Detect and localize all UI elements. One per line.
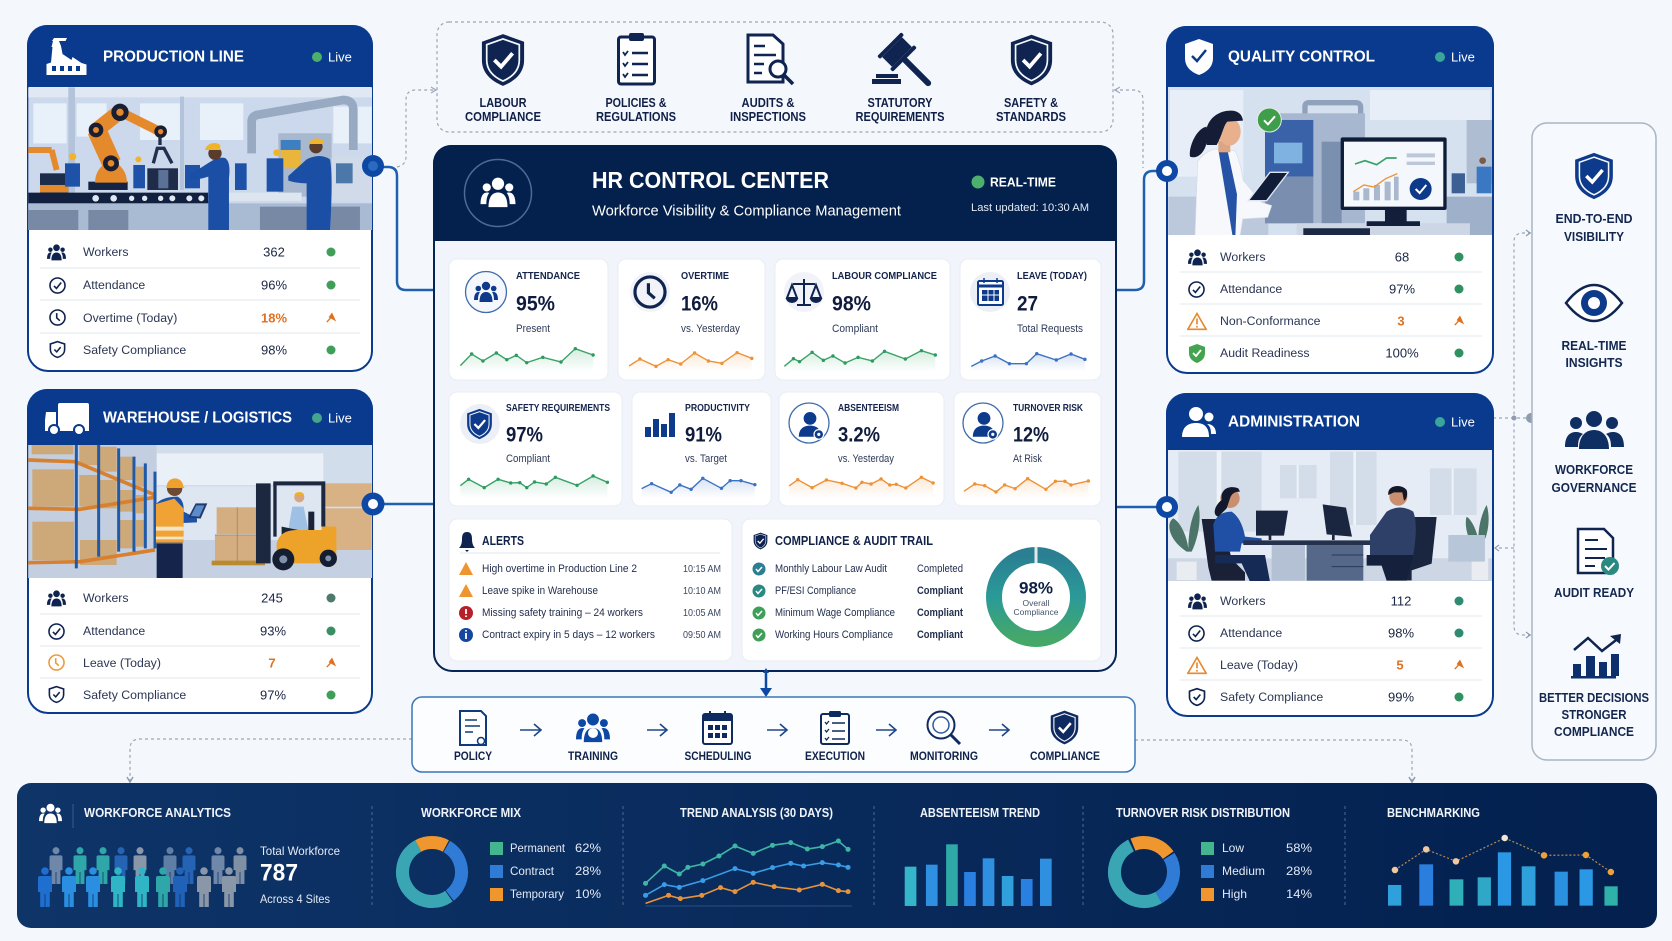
icon: labour compliance shield [482, 34, 524, 86]
label: workforce governance: WORKFORCE [1555, 463, 1633, 477]
step: compliance: COMPLIANCE [1030, 751, 1100, 763]
icon: workforce governance [1565, 411, 1624, 449]
row: leave 5: Leave (Today) [1220, 658, 1298, 672]
row: PF/ESI compliance: PF/ESI Compliance [775, 585, 856, 597]
arrow [767, 724, 787, 736]
step: scheduling [684, 711, 752, 763]
label: better decisions stronger compliance: BETTER DECISIONS [1539, 691, 1649, 705]
alert: missing safety training: Missing safety training – 24 workers [482, 607, 643, 619]
bar chart: absenteeism [905, 844, 1052, 906]
row: safety compliance 97%: Safety Compliance [83, 688, 186, 702]
panel: workflow [412, 697, 1135, 772]
section: absenteeism trend [905, 806, 1052, 906]
status: live: Live [328, 50, 352, 64]
label: statutory requirements: REQUIREMENTS [856, 110, 944, 124]
row: audit readiness 100% [1189, 344, 1464, 363]
legend: workforce mix: 62% [575, 841, 601, 855]
legend: workforce mix: 28% [575, 864, 601, 878]
KPI card: productivity: PRODUCTIVITY [685, 402, 750, 414]
panel: quality control [1166, 26, 1495, 373]
donut chart: 98% overall compliance: Overall [1023, 598, 1050, 608]
KPI card: safety requirements [449, 392, 622, 506]
status: live: Live [1451, 50, 1475, 64]
KPI card: labour compliance: 98% [832, 292, 871, 316]
row: PF/ESI compliance [752, 584, 963, 598]
row: non-conformance 3 [1188, 314, 1463, 329]
arrow [876, 724, 896, 736]
row: attendance 93%: Attendance [83, 624, 145, 638]
row: workers 362 [47, 244, 336, 260]
section: absenteeism trend: ABSENTEEISM TREND [920, 806, 1040, 820]
panel: alerts [449, 519, 732, 661]
scene: warehouse shelves and forklift [28, 445, 375, 579]
row: workers 362: Workers [83, 245, 129, 259]
icon: bell [459, 532, 475, 552]
KPI card: productivity [632, 392, 771, 506]
connector node: quality control [1156, 160, 1178, 182]
legend: workforce mix: Contract [510, 864, 555, 878]
KPI card: attendance: ATTENDANCE [516, 270, 580, 282]
connector node: production [362, 155, 384, 177]
label: statutory requirements [856, 96, 944, 124]
status: live: Live [328, 410, 352, 426]
heading: compliance and audit trail: COMPLIANCE & AUDIT TRAIL [775, 534, 933, 548]
status: live [312, 410, 352, 426]
heading: administration: ADMINISTRATION [1228, 414, 1360, 430]
label: end-to-end visibility: END-TO-END [1556, 212, 1632, 226]
step: training [568, 714, 618, 763]
section: workforce analytics: WORKFORCE ANALYTICS [84, 806, 231, 820]
legend: turnover risk: Medium [1222, 864, 1265, 878]
row: safety compliance 97%: 97% [260, 688, 286, 702]
panel: outcomes [1532, 123, 1656, 760]
alert: contract expiry: 09:50 AM [683, 629, 721, 641]
row: monthly labour law audit [752, 562, 963, 576]
row: attendance 96%: 96% [261, 278, 287, 292]
panel: production line [27, 25, 375, 371]
row: minimum wage compliance: Compliant [917, 607, 963, 619]
row: overtime 18%: 18% [261, 310, 287, 326]
row: working hours compliance: Compliant [917, 629, 963, 641]
KPI card: absenteeism: 3.2% [838, 424, 880, 446]
label: audits and inspections: AUDITS & [742, 96, 794, 110]
label: real-time insights: INSIGHTS [1566, 356, 1622, 370]
section: workforce mix [391, 806, 601, 913]
label: audits and inspections [730, 96, 806, 124]
KPI card: attendance: 95% [516, 292, 555, 316]
KPI card: labour compliance: Compliant [832, 323, 878, 335]
section: benchmarking: BENCHMARKING [1387, 806, 1480, 820]
icon: administrators [1182, 407, 1216, 437]
label: better decisions stronger compliance: COMPLIANCE [1554, 725, 1634, 739]
sparklines for KPI cards [460, 349, 1088, 498]
legend: turnover risk: 14% [1286, 887, 1312, 901]
KPI card: attendance: Present [516, 323, 550, 335]
row: attendance 97%: 97% [1389, 282, 1415, 296]
donut chart: 98% overall compliance: 98% [1019, 578, 1053, 598]
icon: truck [45, 403, 89, 435]
legend: turnover risk: 58% [1286, 841, 1312, 855]
row: safety compliance 99%: 99% [1388, 690, 1414, 704]
KPI card: safety requirements: Compliant [506, 453, 550, 465]
icon: better decisions chart [1571, 634, 1621, 678]
row: working hours compliance: Working Hours Compliance [775, 629, 893, 641]
step: training: TRAINING [568, 751, 618, 763]
step: compliance [1030, 711, 1100, 763]
status: live: Live [1451, 414, 1475, 430]
stat rows: warehouse [40, 590, 360, 702]
row: attendance 98% [1189, 626, 1464, 641]
alert: high overtime: High overtime in Production Line 2 [482, 563, 637, 575]
heading: quality control: QUALITY CONTROL [1228, 48, 1375, 66]
section: turnover risk distribution: TURNOVER RISK DISTRIBUTION [1116, 806, 1290, 820]
legend: turnover risk: Low [1222, 841, 1244, 855]
row: workers 245: 245 [261, 590, 283, 606]
icon: audit shield [754, 533, 767, 549]
stat: total workforce 787 [260, 844, 340, 906]
icon: end-to-end shield [1575, 153, 1613, 199]
donut chart: 98% overall compliance: Compliance [1014, 607, 1059, 617]
label: labour compliance [465, 96, 541, 124]
panel: regulatory requirements [431, 22, 1120, 132]
KPI card: labour compliance: LABOUR COMPLIANCE [832, 270, 937, 282]
label: end-to-end visibility [1556, 212, 1632, 244]
row: attendance 98%: Attendance [1220, 626, 1282, 640]
icon: people in circle [464, 160, 532, 226]
panel: compliance and audit trail [742, 519, 1101, 661]
step: policy [454, 711, 492, 763]
label: labour compliance: LABOUR [480, 96, 526, 110]
legend: workforce mix: 10% [575, 887, 601, 901]
row: non-conformance 3: 3 [1397, 314, 1405, 328]
line chart: 30 day trends [646, 841, 852, 906]
stat rows: administration [1180, 593, 1482, 705]
arrow [989, 724, 1009, 736]
status: live [1435, 50, 1475, 64]
section: trend analysis: TREND ANALYSIS (30 DAYS) [680, 806, 833, 820]
label: safety and standards [996, 96, 1066, 124]
donut chart: turnover risk [1103, 831, 1185, 913]
row: leave 5: 5 [1396, 658, 1404, 672]
row: leave 5 [1188, 658, 1463, 673]
heading: warehouse: WAREHOUSE / LOGISTICS [103, 410, 292, 426]
row: audit readiness 100%: Audit Readiness [1220, 346, 1310, 360]
row: workers 68: 68 [1395, 250, 1409, 264]
row: safety compliance 98% [50, 342, 336, 358]
row: workers 112 [1188, 593, 1464, 609]
panel: warehouse and logistics [27, 389, 375, 713]
row: workers 68: Workers [1220, 250, 1266, 264]
row: safety compliance 98%: 98% [261, 342, 287, 358]
label: audit ready: AUDIT READY [1554, 586, 1635, 600]
label: policies and regulations: POLICIES & [606, 96, 666, 110]
row: attendance 98%: 98% [1388, 626, 1414, 640]
alert: missing safety training [459, 606, 721, 620]
connector: production to top requirements box [397, 90, 436, 167]
legend: turnover risk: 28% [1286, 864, 1312, 878]
section: benchmarking [1387, 806, 1618, 906]
stat rows: quality control [1180, 249, 1482, 363]
stat rows: production line [40, 244, 360, 358]
alert: contract expiry: Contract expiry in 5 days – 12 workers [482, 629, 655, 641]
KPI card: safety requirements: 97% [506, 424, 543, 446]
KPI card: absenteeism: vs. Yesterday [838, 453, 894, 465]
panel: administration [1166, 393, 1495, 716]
section: workforce mix: WORKFORCE MIX [421, 806, 522, 820]
connector: administration to outcomes panel [1493, 230, 1536, 638]
row: attendance 96% [50, 278, 336, 293]
connector: requirements box to quality [1114, 90, 1143, 168]
row: workers 362: 362 [263, 244, 285, 260]
donut chart: workforce mix [391, 831, 473, 913]
label: real-time insights [1562, 339, 1626, 370]
KPI card: productivity: 91% [685, 424, 722, 446]
KPI card: leave today: 27 [1017, 292, 1038, 316]
alert: missing safety training: 10:05 AM [683, 607, 721, 619]
scene: quality inspector with monitor [1167, 87, 1495, 237]
KPI card: attendance [449, 259, 608, 380]
connector: production line to HR center [380, 167, 433, 290]
alert: leave spike [459, 584, 721, 597]
row: workers 245 [47, 590, 336, 606]
pictogram: workforce people [38, 847, 246, 907]
step: execution: EXECUTION [805, 751, 865, 763]
label: workforce governance [1552, 463, 1636, 495]
title: HR CONTROL CENTER [592, 167, 829, 193]
donut chart: 98% overall compliance [994, 547, 1078, 639]
stat: total workforce 787: Total Workforce [260, 844, 340, 858]
KPI card: overtime: vs. Yesterday [681, 323, 740, 335]
connector: administration to HR center [1117, 506, 1160, 508]
label: policies and regulations: REGULATIONS [596, 110, 676, 124]
row: overtime 18%: Overtime (Today) [83, 311, 177, 325]
status: live [312, 50, 352, 64]
row: attendance 93%: 93% [260, 624, 286, 638]
KPI card: turnover risk [954, 392, 1101, 506]
row: workers 245: Workers [83, 591, 129, 605]
arrow [520, 724, 541, 736]
KPI card: leave today: Total Requests [1017, 323, 1083, 335]
combo chart: benchmarking [1388, 838, 1618, 906]
step: scheduling: SCHEDULING [684, 751, 752, 763]
KPI card: overtime [618, 259, 765, 380]
legend: turnover risk [1201, 841, 1312, 901]
heading: alerts: ALERTS [482, 534, 524, 548]
row: attendance 97% [1189, 282, 1464, 297]
row: leave 7: 7 [268, 656, 276, 670]
row: audit readiness 100%: 100% [1385, 346, 1419, 360]
KPI card: leave today: LEAVE (TODAY) [1017, 270, 1087, 282]
last updated: Last updated: 10:30 AM [971, 202, 1089, 214]
row: non-conformance 3: Non-Conformance [1220, 314, 1321, 328]
alert: contract expiry [459, 628, 721, 642]
label: real-time insights: REAL-TIME [1562, 339, 1626, 353]
row: workers 112: Workers [1220, 594, 1266, 608]
KPI card: absenteeism [779, 392, 944, 506]
KPI card: overtime: OVERTIME [681, 270, 729, 282]
icon: policies clipboard [618, 33, 654, 84]
connector node: warehouse [362, 492, 384, 516]
row: safety compliance 97% [49, 687, 336, 702]
legend: workforce mix: Permanent [510, 841, 566, 855]
section: trend analysis [646, 806, 852, 906]
stat: total workforce 787: 787 [260, 860, 298, 886]
KPI card: turnover risk: At Risk [1013, 453, 1042, 465]
connector node: administration [1156, 496, 1178, 518]
step: monitoring: MONITORING [910, 751, 978, 763]
icon: shield [1185, 39, 1213, 75]
row: minimum wage compliance [752, 606, 963, 620]
step: execution [805, 711, 865, 763]
panel: HR control center [433, 145, 1117, 671]
status: live [1435, 414, 1475, 430]
row: attendance 97%: Attendance [1220, 282, 1282, 296]
legend: workforce mix [490, 841, 601, 901]
row: safety compliance 99% [1190, 689, 1464, 705]
KPI card: turnover risk: TURNOVER RISK [1013, 402, 1083, 414]
label: better decisions stronger compliance [1539, 691, 1649, 739]
legend: turnover risk: High [1222, 887, 1247, 901]
row: leave 7 [49, 655, 335, 670]
arrow [647, 724, 667, 736]
row: monthly labour law audit: Completed [917, 563, 963, 575]
KPI card: labour compliance [775, 259, 950, 380]
alert: leave spike: 10:10 AM [683, 585, 721, 597]
label: end-to-end visibility: VISIBILITY [1564, 230, 1625, 244]
label: statutory requirements: STATUTORY [868, 96, 933, 110]
row: minimum wage compliance: Minimum Wage Compliance [775, 607, 895, 619]
row: working hours compliance [752, 628, 963, 642]
connector: quality control to HR center [1117, 171, 1160, 290]
alert: high overtime [459, 562, 721, 575]
KPI card: productivity: vs. Target [685, 453, 727, 465]
row: attendance 93% [49, 624, 336, 639]
icon: gavel [872, 32, 942, 97]
arrow: HR center to workflow [760, 668, 772, 697]
connector: warehouse to HR center [380, 503, 433, 505]
KPI card: turnover risk: 12% [1013, 424, 1049, 446]
KPI card: leave today [960, 259, 1101, 380]
icon: audit document with magnifier [748, 35, 793, 84]
subtitle: Workforce Visibility & Compliance Management [592, 202, 902, 220]
icon: factory [46, 38, 86, 75]
label: better decisions stronger compliance: STRONGER [1562, 708, 1626, 722]
label: labour compliance: COMPLIANCE [465, 110, 541, 124]
row: attendance 96%: Attendance [83, 278, 145, 292]
section: workforce analytics [38, 804, 340, 907]
KPI card: absenteeism: ABSENTEEISM [838, 402, 899, 414]
row: workers 68 [1188, 249, 1464, 265]
scene: robot arm and factory workers [28, 87, 375, 231]
label: safety and standards: SAFETY & [1004, 96, 1058, 110]
row: PF/ESI compliance: Compliant [917, 585, 963, 597]
panel: analytics bar [17, 783, 1657, 928]
stat: total workforce 787: Across 4 Sites [260, 892, 330, 906]
row: safety compliance 99%: Safety Compliance [1220, 690, 1323, 704]
legend: workforce mix: Temporary [510, 887, 564, 901]
label: workforce governance: GOVERNANCE [1552, 481, 1636, 495]
KPI card: safety requirements: SAFETY REQUIREMENTS [506, 402, 610, 414]
heading: production line: PRODUCTION LINE [103, 48, 244, 66]
icon: audit ready document [1578, 529, 1619, 575]
label: audits and inspections: INSPECTIONS [730, 110, 806, 124]
step: policy: POLICY [454, 751, 492, 763]
step: monitoring [910, 712, 978, 763]
row: monthly labour law audit: Monthly Labour Law Audit [775, 563, 887, 575]
alert: leave spike: Leave spike in Warehouse [482, 585, 598, 597]
label: policies and regulations [596, 96, 676, 124]
KPI card: overtime: 16% [681, 292, 718, 316]
row: workers 112: 112 [1391, 594, 1411, 608]
label: safety and standards: STANDARDS [996, 110, 1066, 124]
row: leave 7: Leave (Today) [83, 656, 161, 670]
icon: eye [1566, 285, 1622, 321]
scene: office desk with two staff [1167, 448, 1495, 582]
status: real-time: REAL-TIME [990, 174, 1056, 190]
row: overtime 18% [50, 310, 335, 326]
row: safety compliance 98%: Safety Compliance [83, 343, 186, 357]
section: turnover risk distribution [1103, 806, 1312, 913]
icon: safety shield [1011, 35, 1052, 85]
connector: flow to analytics bar [127, 739, 1415, 782]
alert: high overtime: 10:15 AM [683, 563, 721, 575]
